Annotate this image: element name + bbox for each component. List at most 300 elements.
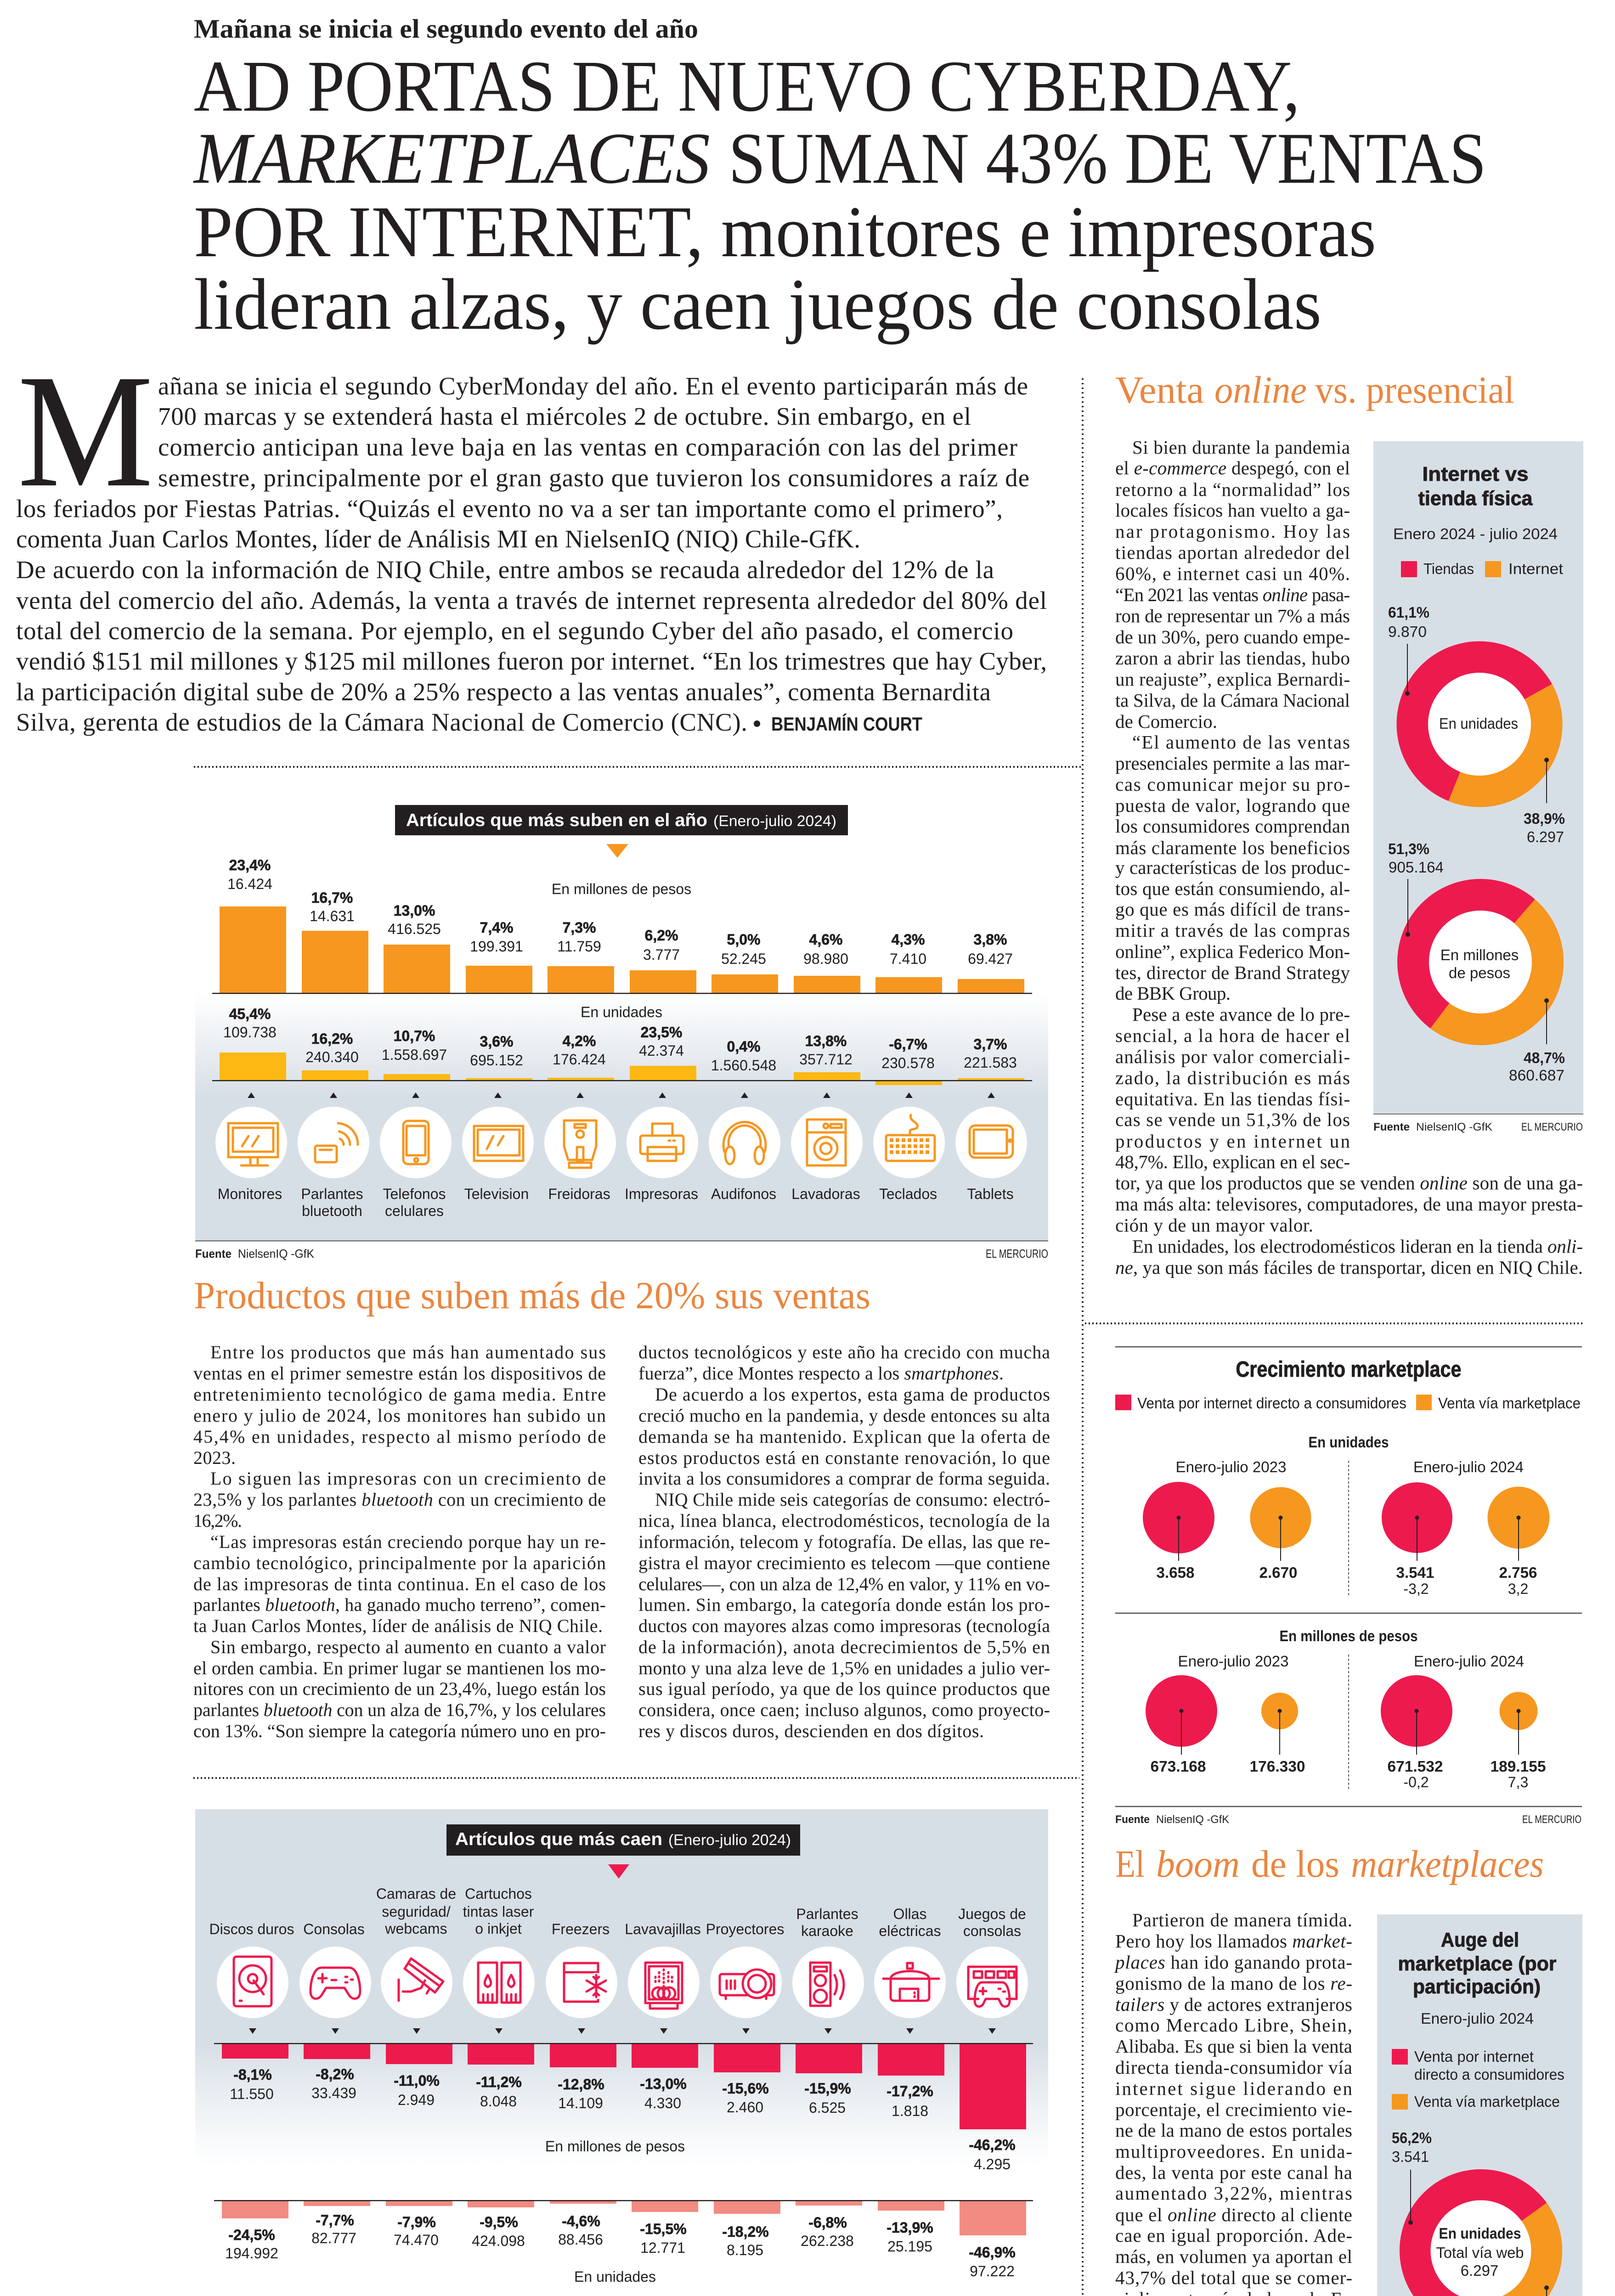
label: en unidades: En unidades [574,2268,656,2285]
text column: marketplaces: que el online directo al cliente [1115,2204,1352,2225]
values: unidades: 25.195 [887,2238,932,2255]
text column: marketplaces: porcentaje, el crecimiento vie- [1115,2099,1352,2120]
product labels: Freidoras [548,1186,610,1202]
values: unidades: -3,2 [1403,1581,1429,1597]
values: unidades: 82.777 [311,2230,356,2246]
product labels: Audifonos [711,1186,776,1202]
product labels [209,1885,1026,1939]
text column: productos 2: nica, línea blanca, electrodomésticos, tecnología de la [638,1510,1050,1531]
percent labels: pesos: -11,2% [476,2074,522,2090]
heading: el boom de los marketplaces: marketplaces [1351,1843,1544,1885]
product labels [218,1186,1014,1219]
intro text: los feriados por Fiestas Patrias. “Quizás el evento no va a ser tan importante como el primero”, [16,495,1003,523]
text column: venta online: los consumidores comprendan [1115,816,1350,837]
values: unidades: 8.195 [727,2242,763,2258]
values: pesos: 2.460 [727,2099,763,2116]
drop cap: M [17,341,153,521]
values: unidades: 3,2 [1508,1581,1528,1597]
values: unidades: 2.670 [1259,1564,1297,1581]
text column: venta online: online”, explica Federico Mon- [1115,941,1350,962]
values: pesos: 7,3 [1508,1774,1528,1790]
percent labels: pesos: 4,3% [892,931,925,948]
title bar [446,1824,800,1856]
panel: internet vs tienda física [1373,441,1583,1133]
percent labels: pesos: -11,0% [394,2072,440,2089]
values: pesos: 2.949 [398,2092,435,2108]
percent labels: unidades: -18,2% [722,2223,769,2240]
text column: venta online: y características de los produc- [1115,857,1350,878]
donut: millones de pesos: de pesos [1449,964,1510,981]
values: pesos: 673.168 [1150,1758,1206,1775]
bottom rule [195,1240,1048,1242]
icon: parlante karaoke [810,1963,844,2006]
text column: productos 2: considera, once caen; incluso algunos, como proyecto- [638,1699,1050,1720]
panel title: marketplace (por [1398,1953,1556,1975]
text column: venta online: de BBK Group. [1115,983,1231,1004]
values: pesos: 14.109 [558,2095,603,2111]
callout: internet pesos: 860.687 [1509,1067,1564,1084]
product labels: seguridad/ [382,1903,451,1920]
percent labels: unidades: 13,8% [805,1033,847,1049]
text column: productos 1: Entre los productos que más han aumentado sus [210,1342,606,1362]
callout: internet unidades [1524,758,1565,845]
title bar: Artículos que más suben en el año [406,810,707,830]
percent labels: unidades: -7,7% [316,2212,354,2228]
donut: en unidades: En unidades [1439,2225,1521,2242]
values: unidades: 357.712 [799,1051,853,1068]
product labels: Proyectores [706,1921,784,1937]
text column: venta online: ne, ya que son más fáciles de transportar, dicen en NIQ Chile. [1115,1257,1583,1278]
text column: venta online: de un 30%, pero cuando empe- [1115,626,1350,647]
gray background [195,1809,1048,2165]
icon circles [217,1947,1028,2018]
percent labels: pesos: -46,2% [969,2137,1016,2153]
percent labels: unidades [229,1006,1007,1055]
legend [1401,560,1563,577]
text column: productos 1 [193,1342,606,1741]
values: pesos: 7.410 [890,951,926,967]
bars: millones de pesos [220,906,1024,993]
text column: venta online: tor, ya que los productos que se venden online son de una ga- [1115,1172,1583,1193]
text column: productos 2: de la información), anota decrecimientos de 5,5% en [638,1637,1050,1657]
text column: productos 2: gistra el mayor crecimiento es telecom —que contiene [638,1553,1050,1573]
text column: marketplaces: como Mercado Libre, Shein, [1115,2015,1352,2036]
legend: Venta por internet directo a consumidores [1137,1395,1406,1412]
percent labels: unidades: -13,9% [887,2219,933,2236]
values: pesos: 416.525 [388,921,441,937]
icon: lavavajillas [645,1963,682,2009]
icon: monitor [228,1123,278,1165]
source: Fuente [1115,1813,1150,1826]
text column: venta online: retorno a la “normalidad” los [1115,479,1350,500]
product labels: o inkjet [475,1920,522,1937]
icon: freidora [564,1120,596,1168]
percent labels: pesos: 7,4% [480,919,513,936]
arrow [608,1864,629,1879]
icon: televisión [474,1126,523,1161]
legend: Venta vía marketplace [1414,2093,1560,2110]
subhead: en unidades: En unidades [1308,1434,1389,1451]
period labels: pesos [1178,1653,1524,1670]
text column: productos 2: De acuerdo a los expertos, esta gama de productos [655,1384,1050,1405]
legend [1115,1395,1581,1412]
text column: productos 1: entretenimiento tecnológico de gama media. Entre [193,1384,606,1405]
values: unidades: 3.658 [1157,1564,1194,1581]
values: pesos: 14.631 [310,908,355,924]
product labels: Monitores [218,1186,282,1202]
panel background [1373,441,1583,1114]
text column: productos 1: cambio tecnológico, principalmente por la aparición [193,1553,606,1573]
text column: venta online: productos y en internet un [1115,1131,1350,1152]
percent labels: unidades: -7,9% [397,2214,436,2230]
percent labels: pesos: 4,6% [809,931,842,948]
axis [214,2043,1033,2044]
chart panel: artículos que más suben [195,805,1048,1261]
callout: tiendas pesos: 51,3% [1388,840,1429,857]
donut: en unidades [1389,2159,1573,2296]
intro text [16,372,1047,736]
product labels: Camaras de [376,1885,456,1902]
panel title: participación) [1413,1975,1541,1998]
text column: marketplaces: internet sigue liderando en [1115,2078,1352,2099]
text column: venta online: nar protagonismo. Hoy las [1115,521,1350,542]
legend: Internet [1508,560,1563,577]
callout: tiendas unidades: 9.870 [1388,623,1427,640]
text column: productos 2: información, telecom y fotografía. De ellas, las que re- [638,1531,1050,1552]
source: Fuente [195,1247,232,1261]
text column: productos 1: enero y julio de 2024, los monitores han subido un [193,1405,606,1426]
text column: productos 1: Lo siguen las impresoras con un crecimiento de [210,1468,606,1489]
values: pesos [230,2085,1011,2172]
percent labels: unidades: -9,5% [480,2214,518,2230]
period labels: unidades: Enero-julio 2023 [1176,1458,1286,1475]
values: pesos: 176.330 [1249,1758,1305,1775]
percent labels: pesos: 6,2% [645,927,678,944]
kicker: Mañana se inicia el segundo evento del año [194,14,698,44]
values: pesos: 189.155 [1490,1758,1546,1775]
text column: marketplaces: multiproveedores. En unida- [1115,2141,1352,2162]
values: pesos: 1.818 [892,2103,928,2119]
text column: marketplaces: cae en igual proporción. Ade- [1115,2225,1352,2246]
percent labels: unidades: -6,8% [808,2214,847,2231]
text column: venta online: ción y de un mayor valor. [1115,1215,1313,1236]
date range: Enero 2024 - julio 2024 [1393,525,1558,542]
source: EL MERCURIO [986,1247,1048,1261]
text column: venta online: equitativa. En las tiendas físi- [1115,1088,1350,1109]
values: pesos: 69.427 [968,951,1013,967]
text column: productos 1: 23,5% y los parlantes bluetooth con un crecimiento de [193,1489,606,1510]
text column: venta online: más claramente los beneficios [1115,837,1350,858]
text column: marketplaces: Partieron de manera tímida. [1132,1909,1352,1930]
text column: venta online: presenciales permite a las mar- [1115,753,1350,774]
product labels: webcams [384,1920,447,1937]
text column: productos 1: el orden cambia. En primer lugar se mantienen los mo- [193,1658,606,1678]
values: unidades: 1.560.548 [711,1057,776,1074]
intro text: De acuerdo con la información de NIQ Chile, entre ambos se recauda alrededor del 12% de la [16,556,994,584]
percent labels: unidades: 23,5% [641,1024,682,1041]
callout: tiendas pesos: 905.164 [1389,859,1444,876]
headline: POR INTERNET, monitores e impresoras [194,191,1376,272]
text column: marketplaces: des, la venta por este canal ha [1115,2162,1352,2183]
icon: consola [311,1968,360,1999]
bubbles: pesos [1146,1675,1538,1755]
text column: productos 2: creció mucho en la pandemia, y desde entonces su alta [638,1405,1050,1426]
heading: venta online vs presencial: online [1214,369,1307,411]
callout: tiendas unidades: 61,1% [1388,604,1429,621]
icon: proyector [720,1970,774,1999]
icon: parlante bluetooth [315,1123,358,1162]
icon: teclado [886,1115,935,1161]
text column: venta online: Pese a este avance de lo pre- [1132,1004,1350,1025]
text column: productos 1: con 13%. “Son siempre la categoría número uno en pro- [193,1721,606,1741]
values: pesos: 199.391 [470,938,523,955]
values: unidades: 230.578 [881,1055,935,1071]
bars: unidades [222,2200,1026,2235]
donut: en unidades: En unidades [1439,715,1518,732]
headline: AD PORTAS DE NUEVO CYBERDAY, [194,46,1300,127]
icon: juegos de consola [968,1967,1016,2007]
axis [212,1080,1032,1081]
product labels: Juegos de [958,1906,1026,1922]
intro text: añana se inicia el segundo CyberMonday del año. En el evento participarán más de [158,372,1028,400]
values: unidades: 12.771 [640,2240,685,2256]
text column: productos 1: Sin embargo, respecto al aumento en cuanto a valor [210,1637,606,1657]
text column: venta online: ma más alta: televisores, computadores, de una mayor presta- [1115,1193,1583,1215]
headline: MARKETPLACES [193,118,710,199]
callout: internet pesos: 48,7% [1524,1049,1565,1066]
text column: venta online: 48,7%. Ello, explican en el sec- [1115,1151,1350,1172]
product labels: Parlantes [796,1906,858,1922]
text column: venta online: tiendas aportan alrededor del [1115,542,1350,563]
values: unidades: 97.222 [970,2263,1015,2279]
product labels: Freezers [552,1921,610,1937]
product labels: Tablets [967,1186,1014,1202]
values: unidades: 109.738 [223,1024,277,1041]
values: pesos [227,876,1013,967]
text column: productos 2: lumen. Sin embargo, la categoría donde están los pro- [638,1594,1050,1615]
divider [1348,1461,1349,1790]
values: unidades: 1.558.697 [382,1047,447,1063]
period labels: unidades: Enero-julio 2024 [1413,1458,1524,1475]
divider lines [193,378,1583,2296]
title bar [395,805,848,835]
source: NielsenIQ -GfK [238,1247,315,1261]
text column: venta online: ron de representar un 7% a más [1115,605,1350,626]
text column: productos 2: res y discos duros, descienden en dos dígitos. [638,1721,984,1741]
values: pesos: 98.980 [803,951,848,967]
values: unidades: 3.541 [1396,1564,1434,1581]
intro text: Silva, gerenta de estudios de la Cámara Nacional de Comercio (CNC). [16,708,747,736]
product labels: tintas laser [463,1903,534,1920]
text column: productos 1: 16,2%. [193,1510,242,1531]
panel title: tienda física [1418,487,1533,510]
values: pesos: 4.330 [644,2095,681,2111]
icon: disco duro [234,1957,271,2006]
label: en millones de pesos: En millones de pesos [552,881,691,897]
icon circles [215,1107,1027,1178]
heading: el boom de los marketplaces: El [1115,1843,1145,1885]
text column: marketplaces: directa tienda-consumidor vía [1115,2057,1352,2078]
text column: productos 1: parlantes bluetooth con un alza de 16,7%, y los celulares [193,1699,606,1720]
percent labels: unidades: -4,6% [562,2213,600,2229]
source: NielsenIQ -GfK [1416,1121,1492,1133]
icon: lavadora [807,1120,846,1165]
callout: internet pesos [1509,998,1565,1084]
source: NielsenIQ -GfK [1156,1813,1229,1826]
values: unidades: 221.583 [964,1054,1017,1071]
heading: el boom de los marketplaces: boom [1156,1843,1240,1885]
label: en unidades: En unidades [581,1004,662,1020]
text column: productos 1: nitores con un crecimiento de un 23,4%, luego están los [193,1678,606,1699]
donut: en unidades: Total vía web [1436,2244,1524,2261]
byline: BENJAMÍN COURT [771,713,922,735]
text column: venta online: zado, la distribución es más [1115,1067,1350,1088]
intro text: vendió $151 mil millones y $125 mil millones fueron por internet. “En los trimestres que hay Cyber, [16,647,1047,675]
intro text: 700 marcas y se extenderá hasta el miércoles 2 de octubre. Sin embargo, en el [158,402,971,430]
text column: productos 2: fuerza”, dice Montes respecto a los smartphones. [638,1363,1004,1384]
values: pesos: 3.777 [643,946,680,963]
text column: venta online: cas comunicar mejor su pro- [1115,774,1350,795]
intro text: comenta Juan Carlos Montes, líder de Análisis MI en NielsenIQ (NIQ) Chile-GfK. [16,525,860,553]
percent labels: unidades: 16,2% [311,1030,353,1047]
text column: productos 1: ventas en el primer semestre están los dispositivos de [193,1363,606,1384]
icon: cartuchos [478,1963,520,2003]
product labels: Television [464,1186,529,1202]
source [1373,1121,1583,1133]
text column: marketplaces: 43,7% del total que se comer- [1115,2267,1352,2288]
text column: venta online: 60%, e internet casi un 40%. [1115,563,1350,584]
percent labels: pesos [233,2066,1016,2153]
bars: unidades [220,1052,1024,1085]
text column: productos 2: demanda se ha mantenido. Explican que la oferta de [638,1426,1050,1447]
product labels: Telefonos [383,1186,446,1202]
text column: productos 2: ductos tecnológicos y este año ha crecido con mucha [638,1342,1050,1362]
source: Fuente [1373,1121,1410,1133]
values: pesos: 11.550 [230,2086,274,2102]
percent labels: unidades: 3,6% [480,1033,513,1050]
title bar: (Enero-julio 2024) [713,812,836,829]
legend: Tiendas [1423,560,1474,577]
text column: marketplaces: aumentado 3,22%, mientras [1115,2183,1352,2204]
chart panel: artículos que más caen [195,1809,1050,2296]
callout: internet unidades: 38,9% [1524,810,1565,827]
small up arrows [248,1092,995,1098]
text column: marketplaces: ne de la mano de estos portales [1115,2120,1352,2141]
percent labels: pesos: 23,4% [229,857,271,873]
text column: venta online: tos que están consumiendo, al- [1115,878,1350,899]
values: pesos: 33.439 [311,2085,356,2101]
bubbles: unidades [1143,1482,1550,1561]
percent labels: unidades: -15,5% [640,2221,687,2237]
icon: cámara [399,1958,443,2001]
source [195,1247,1048,1261]
donut: millones de pesos: En millones [1440,946,1519,963]
text column: marketplaces: Alibaba. Es que si bien la venta [1115,2036,1352,2057]
heading: venta online vs presencial: Venta [1115,369,1204,411]
icon: olla [883,1963,939,2001]
product labels: bluetooth [302,1203,362,1219]
callout: marketplace unidades [1524,2285,1565,2296]
legend: Venta por internet [1414,2048,1534,2065]
percent labels: pesos: -12,8% [558,2076,604,2093]
text column: venta online: cas se vende un 51,3% de los [1115,1109,1350,1130]
percent labels: unidades: 0,4% [727,1038,760,1055]
percent labels: unidades: -46,9% [969,2244,1016,2261]
heading: productos: Productos que suben más de 20% sus ventas [194,1274,870,1317]
text column: venta online: zaron a abrir las tiendas, hubo [1115,647,1350,669]
values: unidades: 42.374 [639,1042,684,1059]
values: unidades [223,1024,1017,1074]
values: pesos: -0,2 [1403,1774,1429,1790]
percent labels: pesos: -13,0% [640,2076,687,2092]
legend: Venta vía marketplace [1438,1395,1581,1412]
values: unidades [225,2230,1015,2279]
values: unidades: 240.340 [305,1049,359,1065]
text column: venta online: “El aumento de las ventas [1132,732,1350,753]
text column: marketplaces: tailers y de actores extranjeros [1115,1994,1352,2015]
intro text: venta del comercio del año. Además, la venta a través de internet representa alrededor del 80% del [16,586,1047,614]
product labels: Cartuchos [465,1885,532,1902]
percent labels: pesos: 16,7% [311,889,353,906]
product labels: celulares [385,1203,444,1219]
icon: teléfono [403,1121,429,1164]
callout: directo unidades [1392,2129,1432,2225]
text column: venta online: Si bien durante la pandemia [1132,437,1350,458]
text column: venta online: puesta de valor, logrando que [1115,795,1350,816]
product labels: Discos duros [209,1921,294,1937]
text column: productos 2: ductos con mayores alzas como impresoras (tecnología [638,1615,1050,1636]
intro text: semestre, principalmente por el gran gasto que tuvieron los consumidores a raíz de [158,464,1029,492]
headline [193,46,1486,345]
axis [214,2200,1033,2201]
text column: venta online [1115,437,1583,1278]
text column: productos 2: NIQ Chile mide seis categorías de consumo: electró- [655,1489,1050,1510]
intro text: total del comercio de la semana. Por ejemplo, en el segundo Cyber del año pasado, el comercio [16,617,1013,645]
values: pesos: 671.532 [1387,1758,1443,1775]
values: pesos: 11.759 [557,938,601,955]
values: pesos: 4.295 [974,2156,1011,2172]
text column: venta online: En unidades, los electrodomésticos lideran en la tienda onli- [1132,1236,1583,1257]
heading: venta online vs presencial [1115,369,1514,411]
percent labels: pesos: -8,1% [233,2066,272,2083]
product labels: Parlantes [301,1186,363,1202]
percent labels: unidades: 10,7% [394,1028,435,1044]
text column: productos 1: 2023. [193,1447,236,1468]
values: unidades: 695.152 [470,1052,523,1069]
panel title [1418,463,1533,510]
icon: impresora [640,1124,683,1161]
icon: audífonos [723,1122,766,1164]
text column: venta online: go que es más difícil de trans- [1115,899,1350,920]
values: unidades: 2.756 [1499,1564,1537,1581]
small down arrows [249,2028,996,2034]
product labels: Lavavajillas [625,1921,701,1937]
panel background [1377,1914,1582,2296]
text column: marketplaces: places han ido ganando prota- [1114,1952,1352,1973]
values: unidades [1157,1564,1537,1597]
heading: el boom de los marketplaces: de los [1251,1843,1339,1885]
rules [1115,1347,1582,1806]
product labels: eléctricas [879,1923,941,1939]
label: en millones de pesos: En millones de pesos [545,2138,685,2155]
chart title: Crecimiento marketplace [1236,1357,1462,1382]
product labels: Teclados [879,1186,937,1202]
text column: venta online: de Comercio. [1115,711,1217,732]
heading: venta online vs presencial: vs. presencial [1315,369,1514,411]
callout: directo unidades: 3.541 [1392,2148,1429,2165]
product labels: Consolas [303,1921,365,1937]
text column: productos 2: estos productos está en constante renovación, lo que [638,1447,1050,1468]
